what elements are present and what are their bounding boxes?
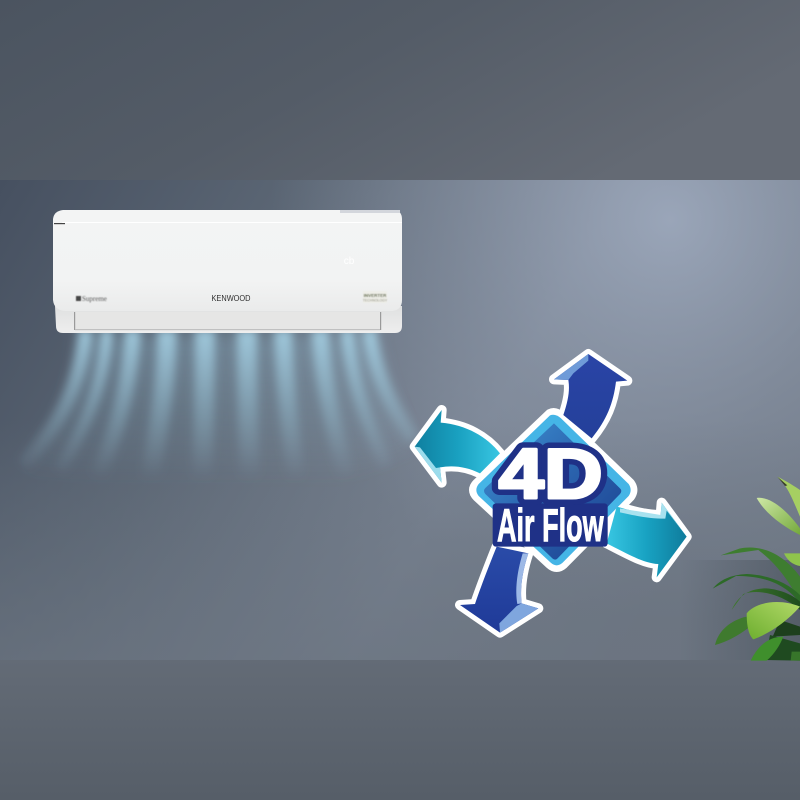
Air Flow backing	[493, 503, 608, 547]
top grey band	[0, 0, 800, 180]
4D Air Flow badge	[415, 354, 687, 633]
4D heading: 4D	[499, 434, 603, 513]
inverter badge: INVERTER	[364, 293, 387, 298]
Supreme label: Supreme	[82, 295, 107, 303]
AC air flap	[74, 312, 381, 330]
arrow: right	[607, 503, 687, 577]
cold air wash	[25, 333, 415, 480]
center diamond	[476, 415, 631, 565]
inverter badge: TECHNOLOGY	[363, 298, 388, 302]
arrow: left	[415, 410, 500, 483]
display digits: cb	[344, 256, 355, 267]
bright leaves	[747, 602, 800, 639]
arrow: up	[554, 354, 627, 438]
bottom grey band	[0, 660, 800, 800]
arrow: down	[460, 547, 538, 633]
plant	[713, 477, 800, 661]
white sticker outline	[415, 354, 687, 633]
wall background panel	[0, 180, 800, 660]
inverter badge	[363, 291, 388, 303]
KENWOOD logo: KENWOOD	[212, 294, 251, 303]
AC lower housing	[55, 306, 402, 333]
cold air streams	[24, 330, 414, 480]
4D heading: 4D	[499, 434, 603, 513]
dark stems and foliage	[713, 547, 800, 661]
AC main body	[53, 210, 402, 311]
Air Flow heading: Air Flow	[497, 499, 604, 551]
air conditioner unit	[53, 210, 402, 333]
